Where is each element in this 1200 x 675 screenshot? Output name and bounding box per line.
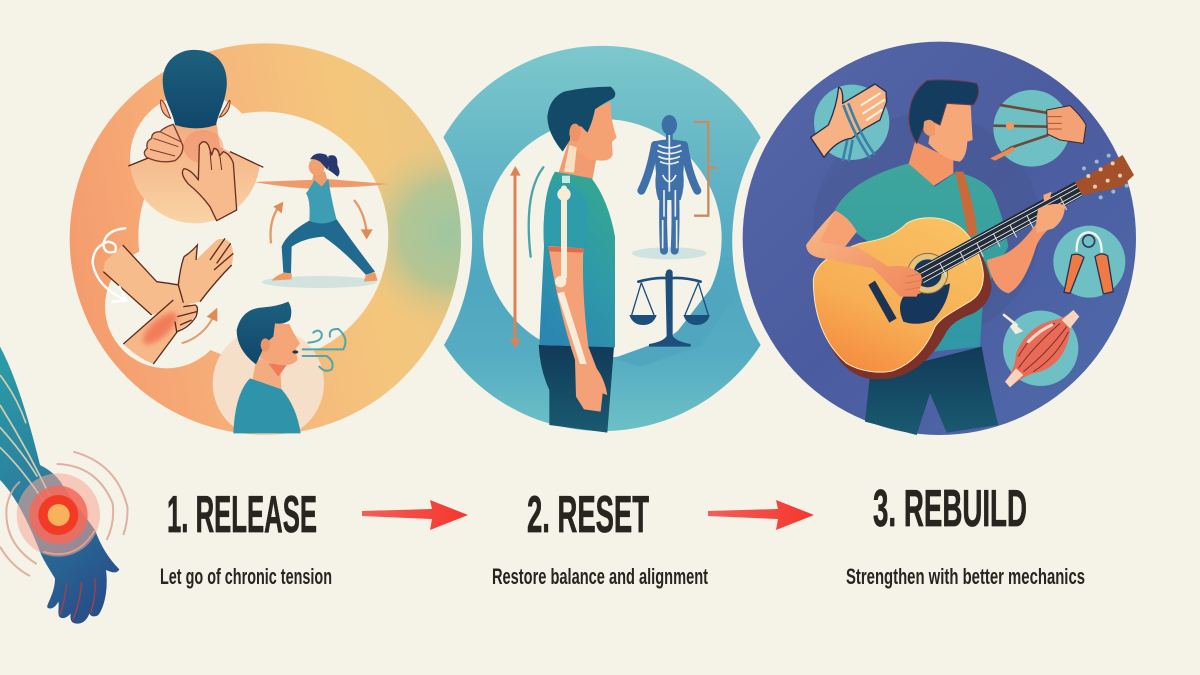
standing man bbox=[539, 87, 617, 433]
arm and hand bbox=[0, 347, 119, 624]
neck and head bbox=[312, 172, 328, 183]
arm bbox=[548, 246, 607, 412]
fretting hand bbox=[1036, 204, 1065, 233]
nerve lines bbox=[0, 375, 53, 503]
skeleton figure bbox=[632, 115, 707, 259]
lower forearm with strain bbox=[123, 300, 198, 364]
pickguard bbox=[900, 283, 950, 324]
legs bbox=[282, 219, 375, 275]
face bbox=[568, 102, 617, 161]
bridge bbox=[868, 281, 897, 323]
guitarist bbox=[806, 80, 1134, 435]
panel: painful arm illustration bbox=[0, 347, 127, 624]
arrow: step 2 to 3 bbox=[708, 500, 814, 530]
description: step 2: Restore balance and alignment bbox=[492, 564, 708, 589]
headstock bbox=[1075, 155, 1134, 195]
hair and ponytail bbox=[310, 153, 339, 177]
soundhole bbox=[908, 253, 948, 293]
breathing man bbox=[233, 302, 345, 433]
neck bbox=[908, 142, 953, 186]
neck massage scene bbox=[128, 50, 263, 230]
guitar body top bbox=[813, 218, 983, 372]
shirt bbox=[835, 163, 1008, 352]
mouth bbox=[292, 350, 298, 354]
panel: reset illustration circle bbox=[443, 46, 761, 433]
indigo disc bbox=[743, 42, 1136, 435]
wrist stretch scene bbox=[93, 228, 233, 364]
height arrow bbox=[509, 166, 521, 348]
hair bbox=[547, 87, 615, 152]
pants bbox=[539, 345, 614, 433]
pain glow bbox=[0, 452, 127, 576]
gripper icon bbox=[1053, 226, 1125, 298]
resistance band icon bbox=[990, 90, 1086, 167]
cream interior bbox=[105, 93, 388, 368]
hair bbox=[237, 302, 291, 364]
floor shadow bbox=[262, 276, 377, 288]
breath swirls bbox=[303, 329, 345, 371]
arrow: step 1 to 2 bbox=[362, 500, 468, 530]
right hand on neck bbox=[182, 142, 237, 221]
finger separations bbox=[60, 578, 95, 620]
panel: rebuild illustration circle bbox=[742, 42, 1136, 435]
left hand on neck bbox=[144, 124, 183, 162]
darker left wash bbox=[637, 143, 850, 330]
heading: step 3: 3. REBUILD bbox=[873, 480, 1027, 538]
hair bbox=[909, 80, 979, 143]
inner shadow disc bbox=[813, 113, 1040, 340]
tank top bbox=[306, 178, 337, 224]
motion arrows bbox=[271, 200, 367, 243]
arms bbox=[254, 179, 388, 189]
rotation arrow bbox=[93, 228, 127, 302]
feet bbox=[272, 272, 378, 282]
spine and ribs bbox=[657, 135, 682, 248]
neck bbox=[558, 142, 597, 180]
teal lens shape bbox=[443, 46, 761, 431]
description: step 1: Let go of chronic tension bbox=[160, 564, 332, 589]
strumming arm and hand bbox=[806, 211, 922, 297]
text: 1. RELEASE bbox=[167, 486, 317, 544]
balance scale bbox=[629, 269, 710, 347]
shirt bbox=[233, 378, 301, 433]
guitar body back edge bbox=[813, 218, 992, 379]
arm bones bbox=[555, 188, 573, 277]
description: step 3: Strengthen with better mechanics bbox=[846, 564, 1085, 589]
legs bbox=[865, 347, 998, 435]
spine bbox=[564, 145, 577, 173]
body bbox=[653, 139, 685, 200]
face bbox=[260, 323, 300, 365]
limbs bbox=[641, 145, 697, 251]
neck bbox=[252, 358, 282, 393]
fretting arm bbox=[987, 223, 1055, 293]
guitar strap bbox=[955, 172, 977, 237]
tuners bbox=[1086, 161, 1122, 189]
alignment bracket bbox=[694, 122, 717, 216]
yoga figure bbox=[254, 153, 388, 288]
gradient ring bbox=[70, 43, 461, 435]
breathing backdrop circle bbox=[212, 334, 324, 434]
neck and fretboard bbox=[917, 182, 1083, 284]
band hand icon bbox=[811, 84, 889, 162]
panel: release illustration circle bbox=[70, 43, 461, 439]
lower blue sweep bbox=[613, 280, 733, 367]
face bbox=[928, 103, 973, 162]
sleeve bbox=[543, 183, 588, 247]
muscle icon bbox=[1003, 310, 1079, 387]
cream interior circle bbox=[483, 119, 722, 358]
heading: step 2: 2. RESET bbox=[527, 486, 649, 544]
posture curve bbox=[529, 167, 543, 257]
upper forearm and palm bbox=[103, 239, 233, 315]
motion arrow bbox=[182, 317, 213, 343]
shirt torso bbox=[539, 172, 615, 347]
back of head hair bbox=[163, 50, 227, 128]
